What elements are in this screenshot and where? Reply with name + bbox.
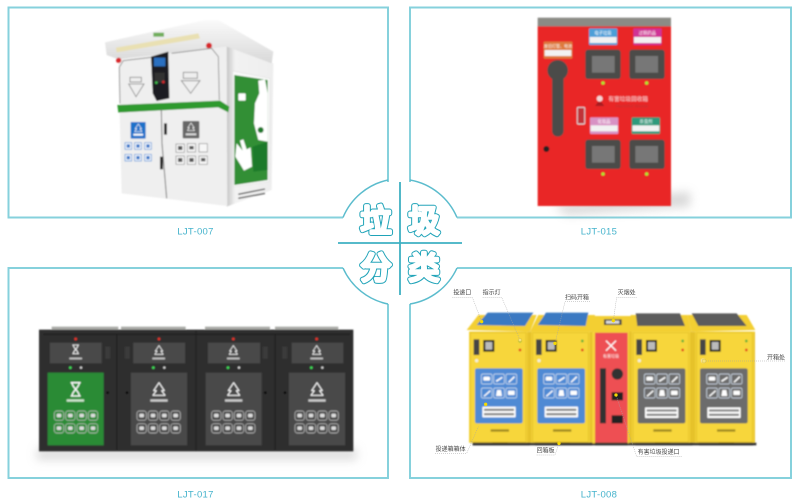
green panel bbox=[48, 373, 104, 445]
frame: bottom-right panel bbox=[410, 268, 791, 478]
callout labels: 回箱板 bbox=[537, 447, 555, 455]
handle bbox=[547, 60, 568, 137]
cabinet title: Harmful Waste bbox=[616, 104, 649, 109]
callout labels: 扫码开箱 bbox=[565, 293, 589, 301]
callout leaders bbox=[435, 297, 785, 457]
lids bbox=[52, 327, 338, 330]
caption LJT-015: LJT-015 bbox=[581, 226, 617, 238]
product: LJT-015 red cabinet bbox=[538, 18, 690, 215]
gray panel 3 bbox=[206, 373, 262, 445]
red lights bbox=[74, 338, 318, 340]
label: 化妆品: 化妆品 bbox=[598, 118, 610, 125]
gray panel 4 bbox=[289, 373, 345, 445]
title: 垃圾分类: 分 bbox=[360, 251, 392, 286]
label: 过期药品 bbox=[633, 28, 662, 45]
label: 杀虫剂 bbox=[632, 117, 660, 134]
bin 4 bbox=[632, 332, 693, 445]
drop slots bbox=[585, 50, 665, 169]
latches bbox=[106, 391, 286, 394]
side poster bbox=[233, 71, 270, 187]
cabinet body bbox=[39, 330, 353, 451]
title: 垃圾分类: 垃 bbox=[360, 204, 392, 239]
cabinet title: 有害垃圾回收箱 bbox=[608, 95, 648, 103]
side wall bbox=[227, 45, 273, 207]
gray icons bbox=[176, 144, 207, 164]
title: 垃圾分类: 分 bbox=[360, 251, 392, 286]
display icons bbox=[72, 345, 321, 354]
bin 1 bbox=[469, 332, 530, 445]
label: 杀虫剂: 杀虫剂 bbox=[640, 118, 652, 125]
callout dots bbox=[480, 319, 706, 445]
base strip bbox=[473, 443, 753, 445]
lids bbox=[477, 313, 747, 326]
label: 电子垃圾 bbox=[589, 28, 617, 45]
display labels bbox=[69, 358, 323, 359]
title: 垃圾分类: 圾 bbox=[408, 204, 440, 239]
bin 5 bbox=[695, 332, 756, 445]
callout labels bbox=[436, 289, 785, 456]
callout labels: 指示灯 bbox=[483, 289, 501, 297]
center emblem bbox=[338, 180, 462, 304]
door seam bbox=[161, 109, 167, 198]
label: 过期药品: 过期药品 bbox=[639, 29, 656, 36]
door handles bbox=[160, 123, 167, 169]
sign: 可回收物 bbox=[131, 122, 146, 139]
red bin bbox=[592, 319, 629, 445]
side slots bbox=[105, 347, 287, 359]
front wall bbox=[118, 45, 227, 206]
logo bbox=[153, 33, 164, 37]
cabinet logo bbox=[595, 96, 604, 106]
slot bbox=[577, 107, 585, 124]
emblem cross bbox=[338, 182, 462, 295]
blue panel 1 bbox=[475, 368, 523, 423]
title: 垃圾分类: 类 bbox=[408, 251, 440, 286]
title: 垃圾分类: 垃 bbox=[360, 204, 392, 239]
callout labels: 投递箱箱体 bbox=[436, 445, 466, 453]
title: 垃圾分类: 圾 bbox=[408, 204, 440, 239]
cabinet title bbox=[608, 95, 649, 109]
label: 灯管 bbox=[544, 42, 572, 59]
base logo bbox=[238, 189, 265, 198]
caption LJT-017: LJT-017 bbox=[177, 490, 214, 500]
label: 电子垃圾: 电子垃圾 bbox=[594, 29, 612, 36]
poster rabbit bbox=[235, 79, 268, 172]
callout labels: 有害垃圾投递口 bbox=[638, 448, 680, 456]
displays bbox=[50, 343, 343, 363]
roof bbox=[105, 20, 273, 63]
callout labels: 灭烟处 bbox=[618, 289, 636, 297]
caption LJT-007: LJT-007 bbox=[177, 226, 214, 238]
product: LJT-008 yellow bins bbox=[435, 289, 785, 457]
label: 化妆品 bbox=[590, 117, 618, 134]
frame: top-left panel bbox=[8, 8, 388, 218]
blue panel 2 bbox=[537, 368, 585, 423]
light strip bbox=[116, 33, 200, 52]
emblem arcs bbox=[343, 180, 457, 304]
status lights bbox=[69, 366, 323, 369]
gray panel 4 bbox=[638, 368, 685, 423]
red bin: 有害垃圾 bbox=[603, 352, 619, 358]
label: 灯管: 废旧灯管、电池 bbox=[544, 43, 572, 49]
gray panel 5 bbox=[700, 368, 748, 423]
top bar bbox=[538, 18, 671, 26]
upper doors bbox=[119, 48, 219, 103]
blue icons bbox=[125, 143, 151, 161]
title: 垃圾分类 bbox=[360, 204, 440, 286]
warning lights bbox=[116, 43, 212, 63]
dividers bbox=[43, 330, 350, 451]
top faces bbox=[467, 315, 755, 332]
sign: 其他垃圾 bbox=[183, 121, 199, 138]
frame: bottom-left panel bbox=[8, 268, 388, 478]
frame: top-right panel bbox=[410, 8, 791, 218]
smoke device bbox=[604, 319, 622, 325]
title: 垃圾分类: 类 bbox=[408, 251, 440, 286]
indicators bbox=[601, 81, 648, 176]
cabinet bbox=[538, 26, 671, 206]
gray panel 2 bbox=[131, 373, 187, 445]
product: LJT-007 white kiosk bbox=[105, 20, 273, 207]
shadow bbox=[553, 192, 690, 215]
lock bbox=[543, 146, 549, 152]
green band bbox=[117, 101, 229, 113]
caption LJT-008: LJT-008 bbox=[581, 490, 617, 500]
callout labels: 开箱处 bbox=[767, 353, 785, 361]
product: LJT-017 dark bins bbox=[37, 327, 357, 460]
bin backing bbox=[469, 332, 755, 443]
hazard cross bbox=[606, 341, 616, 351]
bin 2 bbox=[531, 332, 592, 445]
shadow bbox=[37, 448, 357, 460]
callout labels: 投递口 bbox=[453, 289, 471, 297]
control panel bbox=[151, 52, 169, 101]
